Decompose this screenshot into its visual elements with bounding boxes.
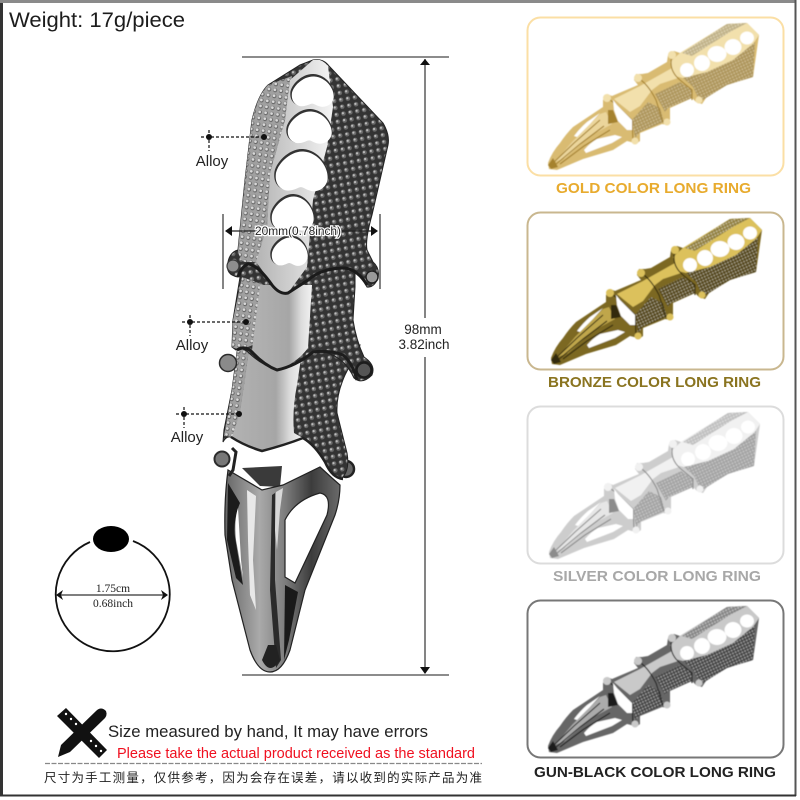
panel: gold: GOLD COLOR LONG RING — [556, 180, 751, 197]
third segment — [223, 345, 360, 479]
alloy callout 1: Alloy — [196, 153, 229, 170]
height dimension: 3.82inch — [398, 337, 450, 352]
top segment — [227, 59, 388, 293]
panel: gun-black: GUN-BLACK COLOR LONG RING — [534, 764, 776, 781]
panel: gun-black — [528, 600, 784, 781]
dashed divider note — [45, 762, 482, 764]
alloy callout 2 — [176, 315, 249, 354]
height dimension: 98mm — [404, 322, 442, 337]
width dimension — [223, 214, 380, 289]
height dimension — [242, 57, 450, 675]
panel: silver — [528, 406, 784, 585]
icon: crossed ruler and pencil — [57, 708, 107, 758]
panel: bronze: BRONZE COLOR LONG RING — [548, 374, 761, 391]
chinese note: 尺寸为手工测量，仅供参考，因为会存在误差，请以收到的实际产品为准 — [44, 770, 482, 785]
ring inner diameter diagram — [56, 526, 170, 651]
tip segment — [214, 448, 354, 672]
alloy callout 1 — [196, 130, 267, 170]
width dimension: 20mm(0.78inch) — [255, 224, 341, 238]
alloy callout 3: Alloy — [171, 429, 204, 446]
panel: silver: SILVER COLOR LONG RING — [553, 568, 761, 585]
panel: bronze — [528, 212, 784, 391]
heart holes — [269, 73, 336, 267]
panel: gold — [528, 18, 784, 197]
weight heading: Weight: 17g/piece — [9, 9, 185, 32]
alloy callout 3 — [171, 407, 242, 446]
second segment — [220, 265, 373, 381]
ring inner diameter diagram: 1.75cm — [96, 583, 130, 595]
red standard note: Please take the actual product received as the standard — [117, 745, 475, 762]
main ring photo — [214, 59, 388, 672]
measurement note: Size measured by hand, It may have errors — [108, 722, 428, 741]
alloy callout 2: Alloy — [176, 337, 209, 354]
ring inner diameter diagram: 0.68inch — [93, 598, 133, 610]
